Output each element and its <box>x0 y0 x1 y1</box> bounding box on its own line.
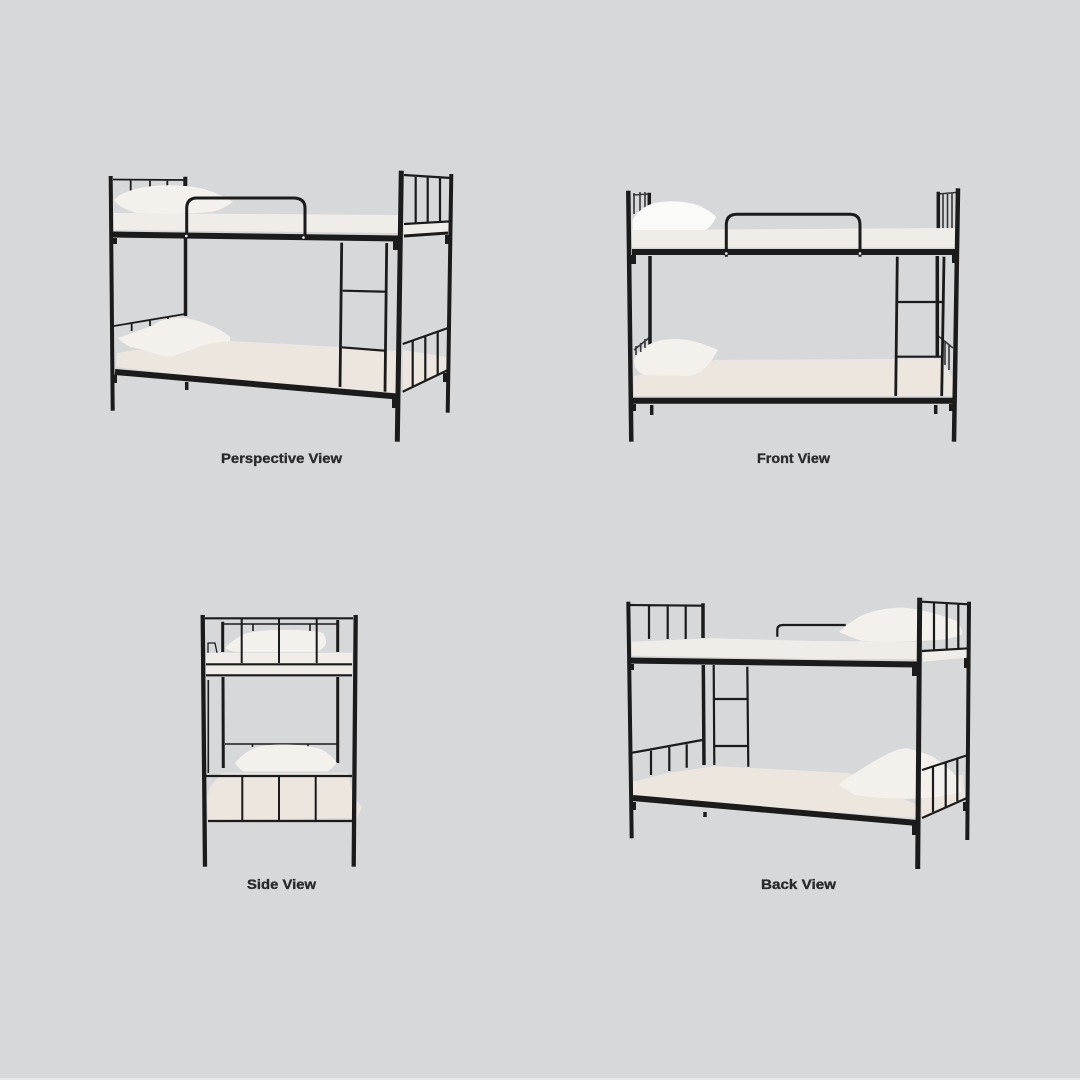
label: front view: Front View <box>757 450 830 466</box>
icon: front view bunk bed <box>628 188 958 442</box>
icon: perspective view bunk bed <box>111 171 451 442</box>
label: back view: Back View <box>761 876 836 892</box>
icon: back view bunk bed <box>628 598 969 869</box>
panel: back view <box>628 598 969 892</box>
label: side view: Side View <box>247 876 316 892</box>
panel: front view <box>628 188 958 466</box>
icon: side view bunk bed <box>203 615 362 867</box>
panel: perspective view <box>111 171 451 466</box>
panel: side view <box>203 615 362 892</box>
label: perspective view: Perspective View <box>221 450 342 466</box>
